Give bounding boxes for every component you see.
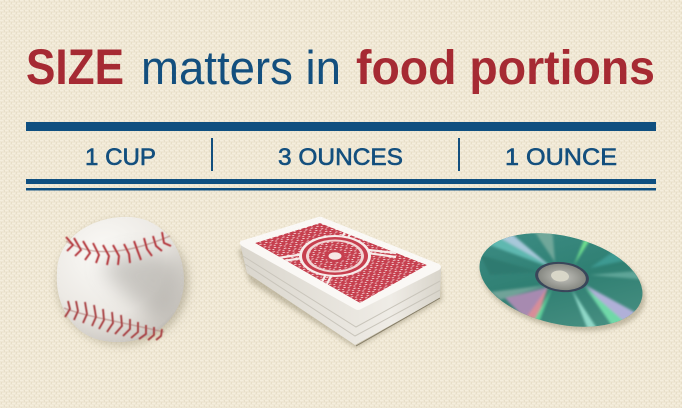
icon: baseball (56, 217, 188, 346)
lower seam (64, 301, 164, 340)
label: 1 ounce: 1 OUNCE (505, 144, 617, 171)
rainbow reflections (481, 233, 639, 326)
header band: portion size labels (26, 122, 656, 190)
title: SIZE (26, 39, 124, 95)
title: matters in (141, 41, 341, 94)
label: 1 cup: 1 CUP (85, 144, 156, 171)
title: food portions (356, 42, 655, 95)
hub (534, 259, 590, 295)
deck side edges (240, 243, 441, 345)
icon: deck of playing cards (238, 217, 442, 348)
red card back pattern (255, 223, 427, 303)
upper seam (66, 232, 171, 265)
icon: compact disc (478, 233, 648, 333)
title (26, 39, 655, 95)
label: 3 ounces: 3 OUNCES (278, 144, 403, 171)
top card face (240, 217, 441, 310)
